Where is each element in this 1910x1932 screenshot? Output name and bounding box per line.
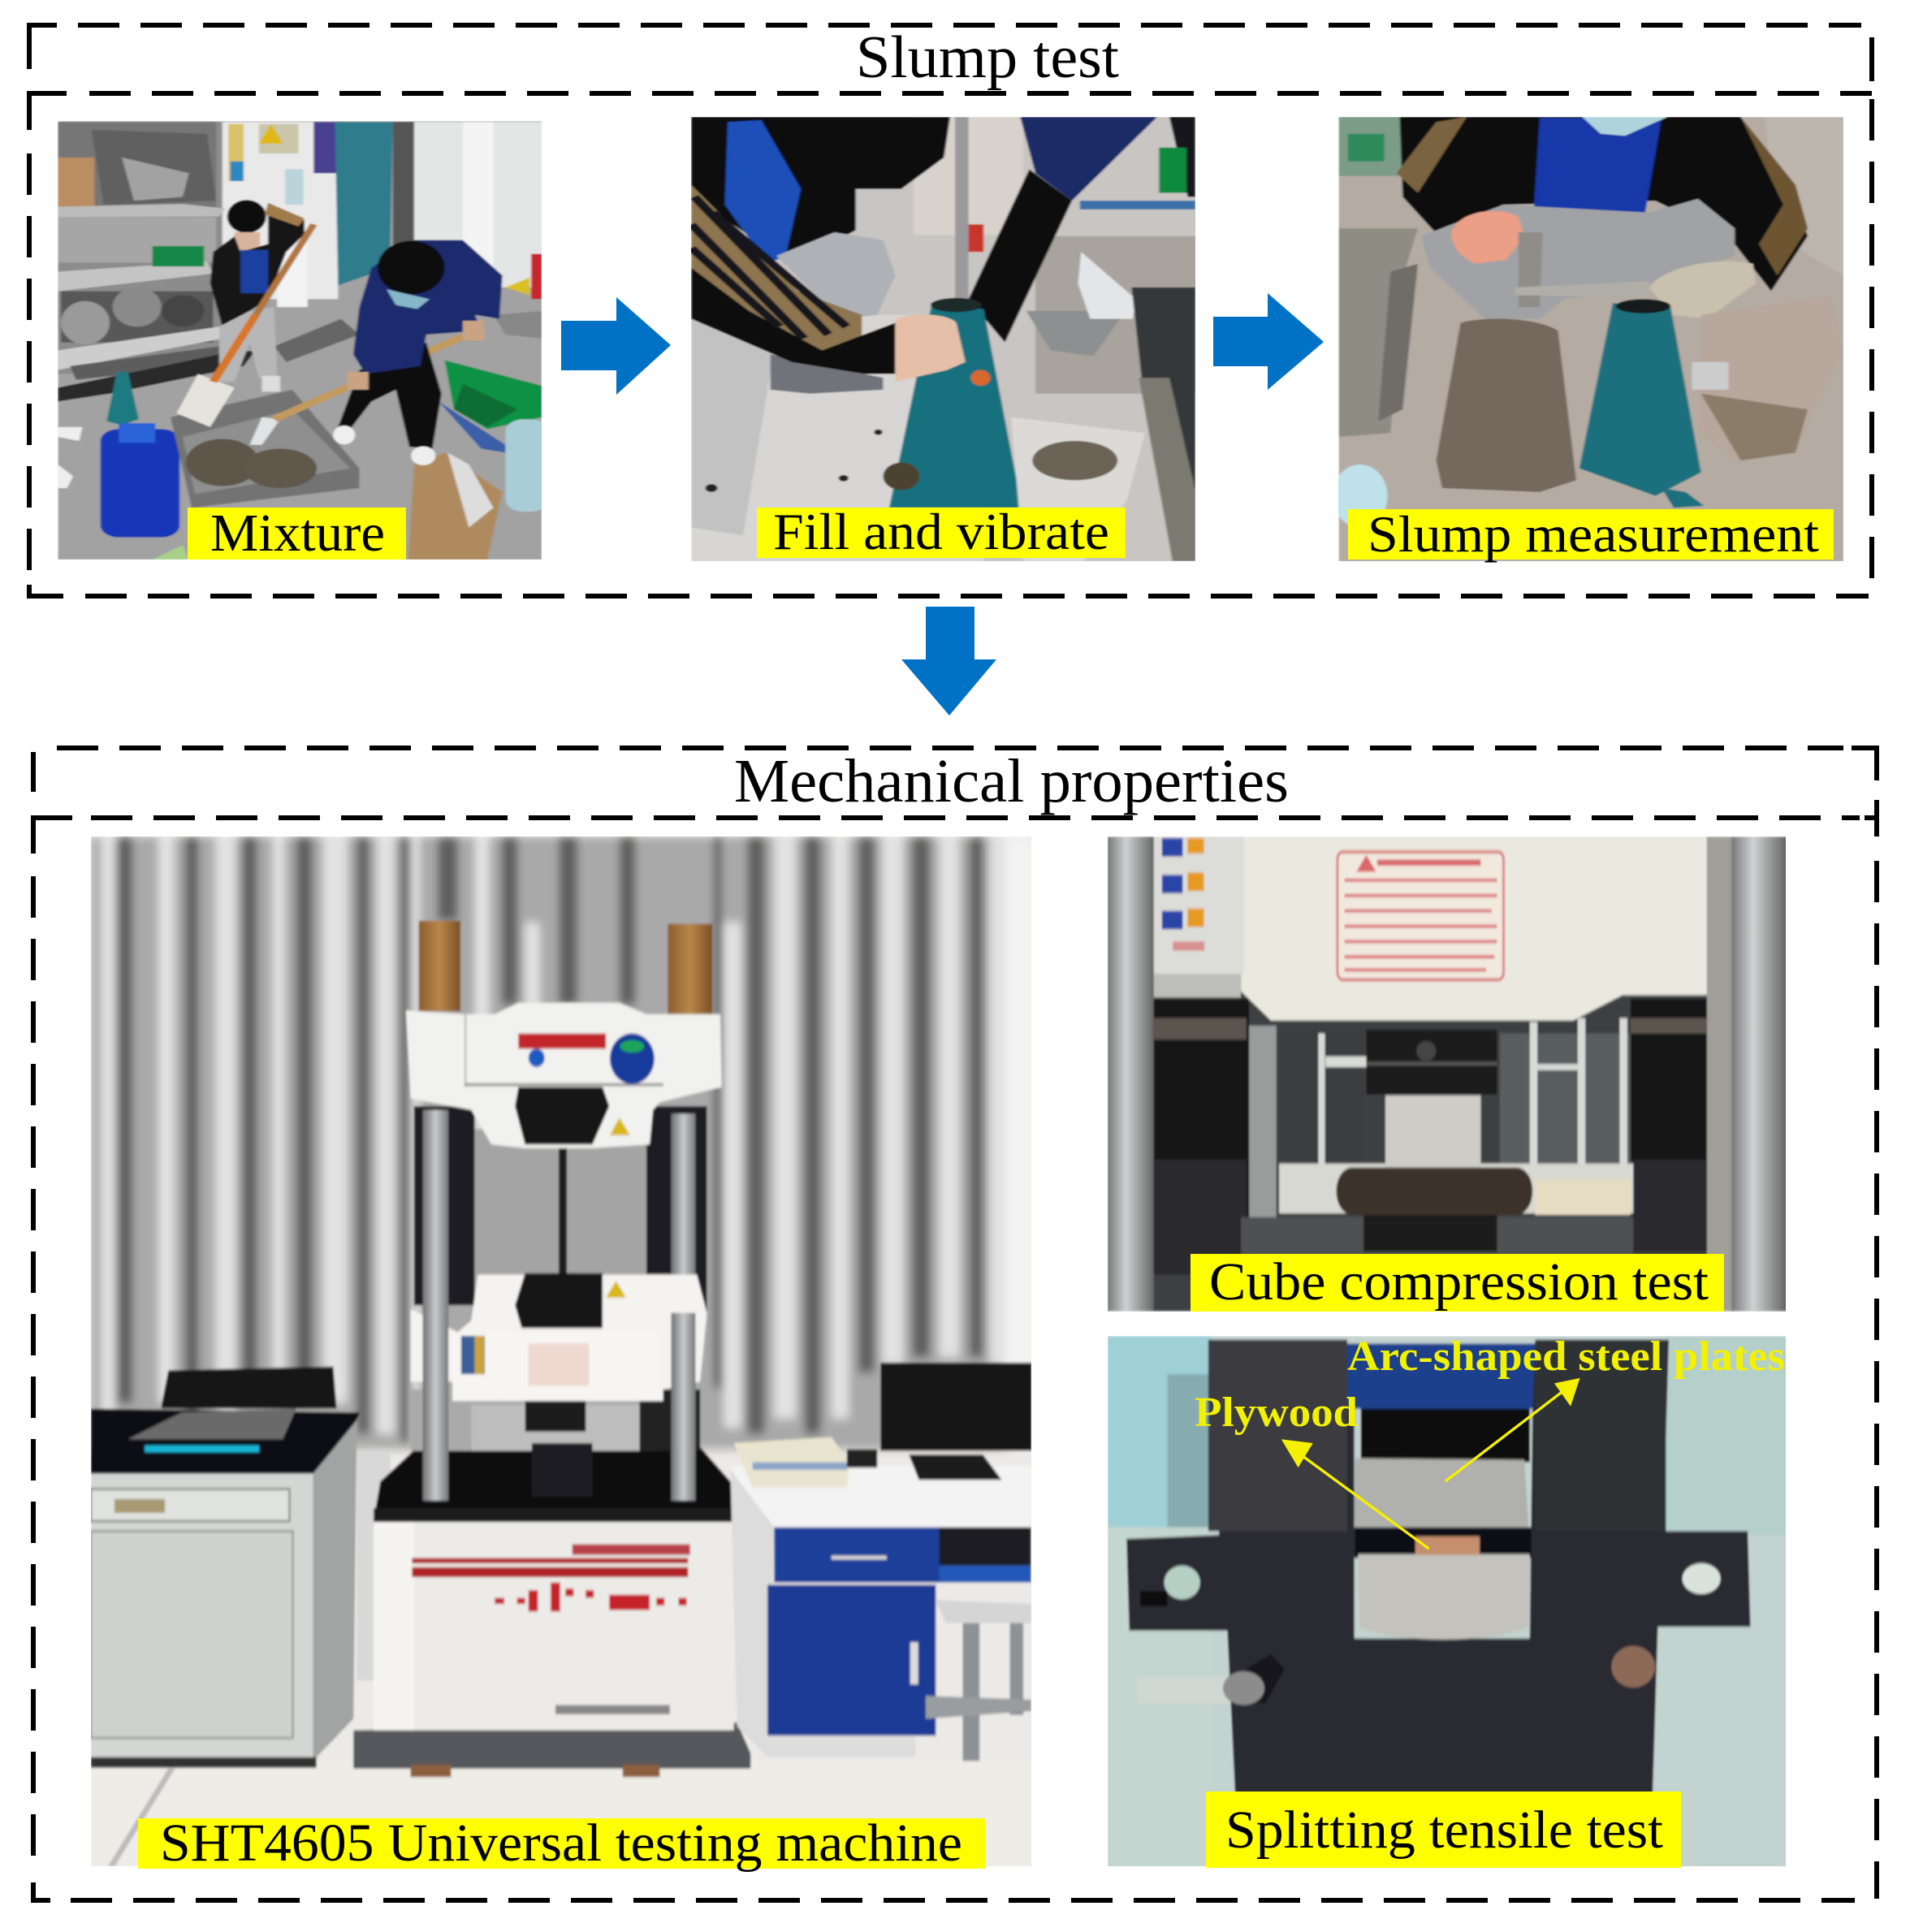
dashed frame: slump test <box>29 25 1872 596</box>
arrow: slump test to mechanical properties <box>901 607 996 715</box>
panel: slump test <box>29 24 1872 596</box>
heading: Mechanical properties: Mechanical properties <box>734 747 1289 815</box>
photo: fill and vibrate <box>691 117 1197 562</box>
label: Slump measurement: Slump measurement <box>1368 505 1819 563</box>
panel: mechanical properties <box>33 747 1877 1900</box>
label: Mixture: Mixture <box>210 504 385 563</box>
callout: Plywood arrow <box>1281 1439 1429 1549</box>
photo: slump measurement <box>1333 117 1844 563</box>
dashed frame: mechanical properties <box>33 748 1877 1900</box>
photo: splitting tensile test <box>1108 1333 1788 1872</box>
photo: cube compression test <box>1108 836 1788 1312</box>
label: Splitting tensile test <box>1206 1792 1681 1868</box>
label: Splitting tensile test: Splitting tensile test <box>1225 1800 1663 1860</box>
callout: Arc-shaped steel plates arrow <box>1445 1378 1580 1481</box>
heading: Slump test: Slump test <box>856 24 1119 91</box>
label: Fill and vibrate: Fill and vibrate <box>773 503 1109 560</box>
label: SHT4605 Universal testing machine: SHT4605 Universal testing machine <box>160 1813 962 1873</box>
arrow: fill to slump <box>1213 293 1324 390</box>
photo: mixture <box>58 121 548 563</box>
label: Arc-shaped steel plates: Arc-shaped steel plates <box>1347 1333 1785 1380</box>
label: Cube compression test: Cube compression test <box>1209 1252 1709 1312</box>
label: Plywood: Plywood <box>1195 1390 1358 1436</box>
arrow: mixture to fill <box>561 297 671 395</box>
photo: SHT4605 universal testing machine <box>91 836 1034 1873</box>
